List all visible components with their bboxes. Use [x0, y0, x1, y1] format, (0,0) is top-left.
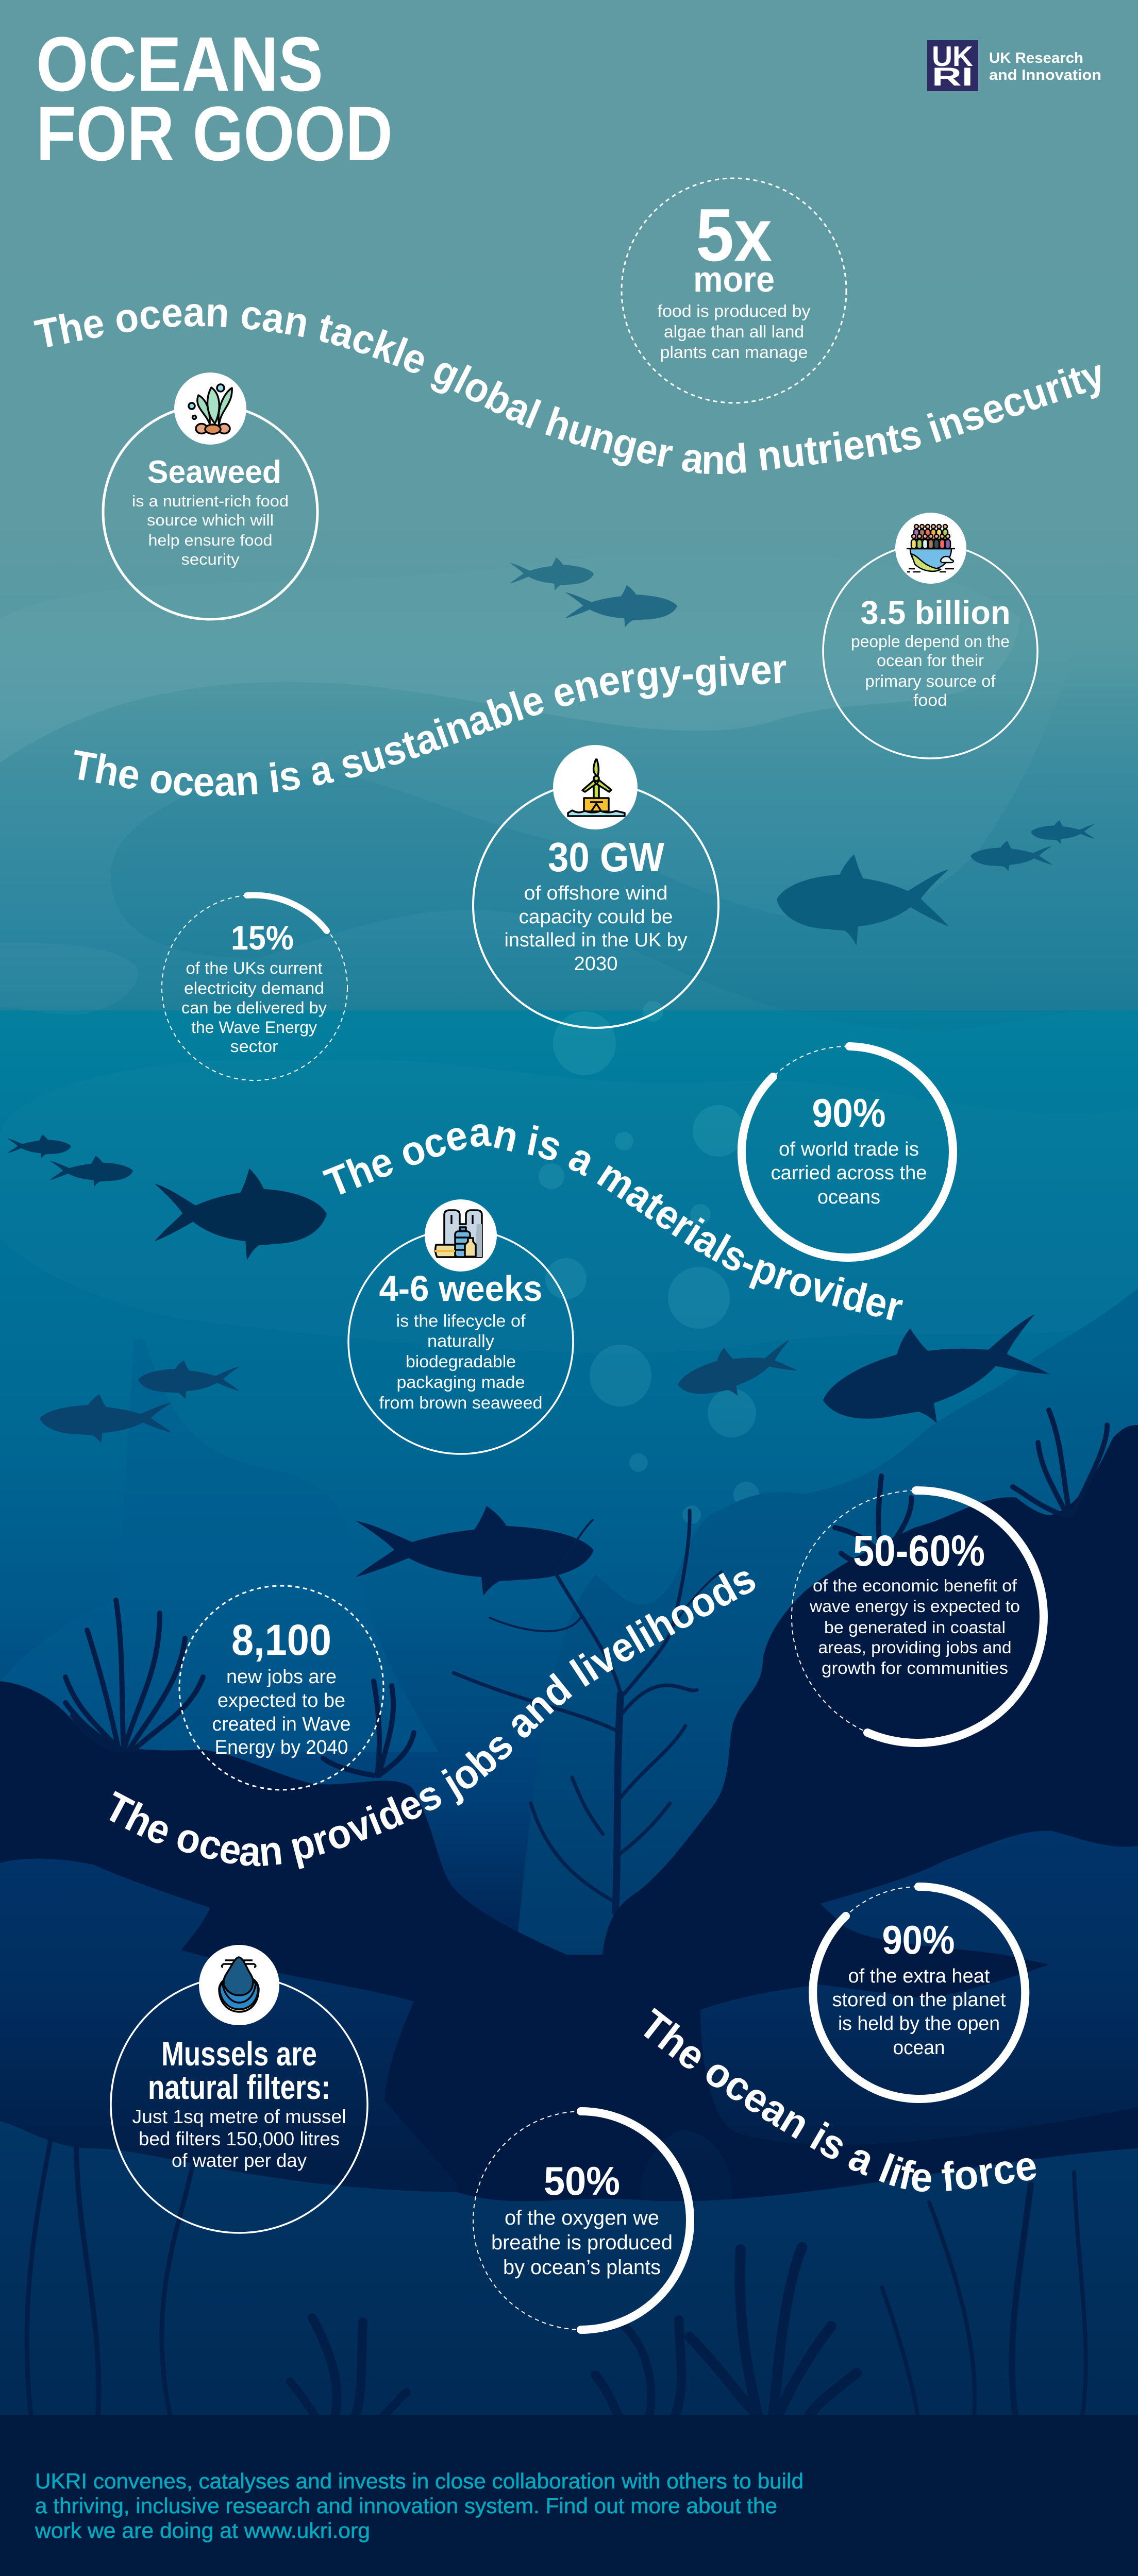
logo: UKRI: UK [932, 40, 973, 72]
stat: 15%: sector [230, 1037, 278, 1056]
background: rear rock [515, 1288, 1138, 1958]
stat: 30 GW: 2030 [574, 953, 617, 975]
stat: 50% oxygen: of the oxygen we [505, 2207, 659, 2229]
stat: 30 GW: of offshore wind [524, 883, 668, 904]
title: OCEANS [36, 21, 323, 107]
stat: 3.5 billion: food [913, 691, 947, 709]
stat: 3.5 billion: ocean for their [877, 651, 984, 670]
icon: mussel [199, 1945, 279, 2025]
stat: 50-60% [792, 1490, 1044, 1743]
stat: 8,100 jobs: Energy by 2040 [214, 1737, 348, 1758]
icon: offshore wind turbine [553, 745, 638, 829]
stat: seaweed [103, 372, 317, 619]
stat: 4-6 weeks [348, 1199, 573, 1454]
low sea floor waves [0, 2121, 1138, 2415]
stat: 5x more: food is produced by [658, 301, 811, 320]
icon: packaging [425, 1199, 497, 1272]
stat: 30 GW: capacity could be [518, 906, 673, 928]
stat: seaweed: source which will [147, 511, 274, 529]
heading: jobs and livelihoods: The ocean provides jobs and livelihoods [109, 1571, 756, 1869]
stat: 4-6 weeks: biodegradable [406, 1352, 516, 1371]
logo: UKRI: UK Research [989, 50, 1083, 66]
stat: 4-6 weeks: packaging made [397, 1372, 525, 1392]
stat: mussels: of water per day [172, 2150, 307, 2171]
stat: 50% oxygen: breathe is produced [491, 2231, 673, 2254]
logo: UKRI: RI [932, 62, 973, 91]
stat: 5x more [622, 178, 846, 403]
stat: 90% world trade: of world trade is [779, 1139, 919, 1160]
stat: 4-6 weeks: naturally [427, 1331, 495, 1350]
stat: 8,100 jobs: new jobs are [226, 1666, 337, 1688]
stat: seaweed: is a nutrient-rich food [132, 492, 289, 510]
footer text: a thriving, inclusive research and innovation system. Find out more about the [35, 2494, 777, 2518]
foreground: dark sea bed [0, 1425, 1138, 2415]
stat: seaweed: security [181, 550, 240, 568]
stat: 90% extra heat: 90% [882, 1917, 955, 1962]
stat: 5x more: more [693, 259, 775, 299]
stat: 30 GW: 30 GW [548, 834, 664, 880]
stat: 90% extra heat: stored on the planet [832, 1989, 1006, 2011]
stat: 8,100 jobs: 8,100 [231, 1616, 331, 1664]
background: tree coral [454, 1511, 722, 1912]
stat: 50% oxygen: 50% [544, 2158, 620, 2204]
stat: 50-60%: growth for communities [822, 1658, 1008, 1677]
stat: seaweed: help ensure food [148, 531, 272, 549]
stat: mussels: natural filters: [148, 2068, 330, 2106]
stat: 15%: electricity demand [184, 979, 324, 997]
stat: 5x more: plants can manage [660, 343, 808, 362]
stat: 15% [162, 895, 347, 1080]
kelp clusters [65, 1410, 1107, 1775]
stat: 90% world trade [742, 1046, 953, 1258]
stat: 5x more: 5x [696, 193, 772, 277]
stat: 90% world trade: 90% [812, 1090, 885, 1136]
footer band [0, 2415, 1138, 2576]
icon: people on globe [895, 513, 966, 584]
stat: 3.5 billion: 3.5 billion [861, 594, 1010, 631]
stat: mussels: Just 1sq metre of mussel [132, 2106, 346, 2127]
stat: 90% world trade: oceans [817, 1187, 880, 1208]
shark silhouettes [7, 557, 1095, 1596]
footer text: work we are doing at www.ukri.org [35, 2518, 370, 2543]
stat: 3.5 billion: people depend on the [851, 632, 1010, 651]
background: upper left rock [0, 1340, 438, 1752]
stat: 50% oxygen: by ocean’s plants [503, 2256, 661, 2279]
stat: mussels: Mussels are [161, 2035, 317, 2073]
stat: 90% extra heat: ocean [893, 2037, 945, 2059]
stat: 90% extra heat [813, 1887, 1025, 2099]
stat: 50-60%: 50-60% [853, 1527, 985, 1575]
logo: UKRI: and Innovation [989, 67, 1101, 83]
stat: 15%: can be delivered by [181, 998, 327, 1017]
logo: UKRI [927, 40, 1101, 91]
title [36, 21, 393, 177]
heading: tackle hunger: The ocean can tackle global hunger and nutrients insecurity [34, 304, 1100, 474]
bubbles [539, 1001, 784, 1649]
title: FOR GOOD [36, 90, 393, 177]
footer text: UKRI convenes, catalyses and invests in close collaboration with others to build [35, 2469, 804, 2493]
sea grass silhouettes [27, 2138, 1086, 2415]
stat: mussels [111, 1945, 367, 2233]
stat: mussels: bed filters 150,000 litres [139, 2128, 340, 2149]
stat: seaweed: Seaweed [147, 454, 281, 490]
stat: 50% oxygen [473, 2111, 692, 2330]
stat: 90% world trade: carried across the [771, 1162, 927, 1184]
stat: 50-60%: wave energy is expected to [809, 1597, 1020, 1616]
stat: 3.5 billion: primary source of [865, 672, 996, 690]
heading: energy-giver: The ocean is a sustainable energy-giver [74, 655, 786, 796]
stat: 50-60%: be generated in coastal [824, 1618, 1006, 1637]
stat: 30 GW [473, 745, 718, 1028]
stat: 3.5 billion [823, 513, 1037, 758]
stat: 8,100 jobs: expected to be [217, 1690, 345, 1711]
stat: 4-6 weeks: is the lifecycle of [396, 1311, 526, 1330]
stat: 50-60%: areas, providing jobs and [818, 1638, 1011, 1657]
icon: seaweed [174, 372, 246, 445]
stat: 8,100 jobs: created in Wave [212, 1714, 350, 1735]
stat: 30 GW: installed in the UK by [504, 929, 688, 951]
stat: 90% extra heat: of the extra heat [848, 1965, 990, 1987]
stat: 15%: 15% [231, 919, 294, 957]
stat: 4-6 weeks: 4-6 weeks [379, 1268, 542, 1309]
stat: 15%: of the UKs current [186, 959, 323, 977]
footer text [35, 2469, 804, 2543]
background: upper water blobs [0, 551, 1138, 1352]
stat: 8,100 jobs [179, 1586, 383, 1790]
stat: 50-60%: of the economic benefit of [813, 1576, 1017, 1595]
stat: 15%: the Wave Energy [191, 1018, 317, 1037]
rocks on the sea bed [0, 1831, 1138, 2215]
stat: 90% extra heat: is held by the open [838, 2013, 1000, 2035]
stat: 4-6 weeks: from brown seaweed [379, 1393, 542, 1412]
heading: materials-provider: The ocean is a materials-provider [322, 1124, 903, 1320]
heading: life force: The ocean is a life force [644, 2008, 1036, 2192]
stat: 5x more: algae than all land [664, 322, 804, 341]
